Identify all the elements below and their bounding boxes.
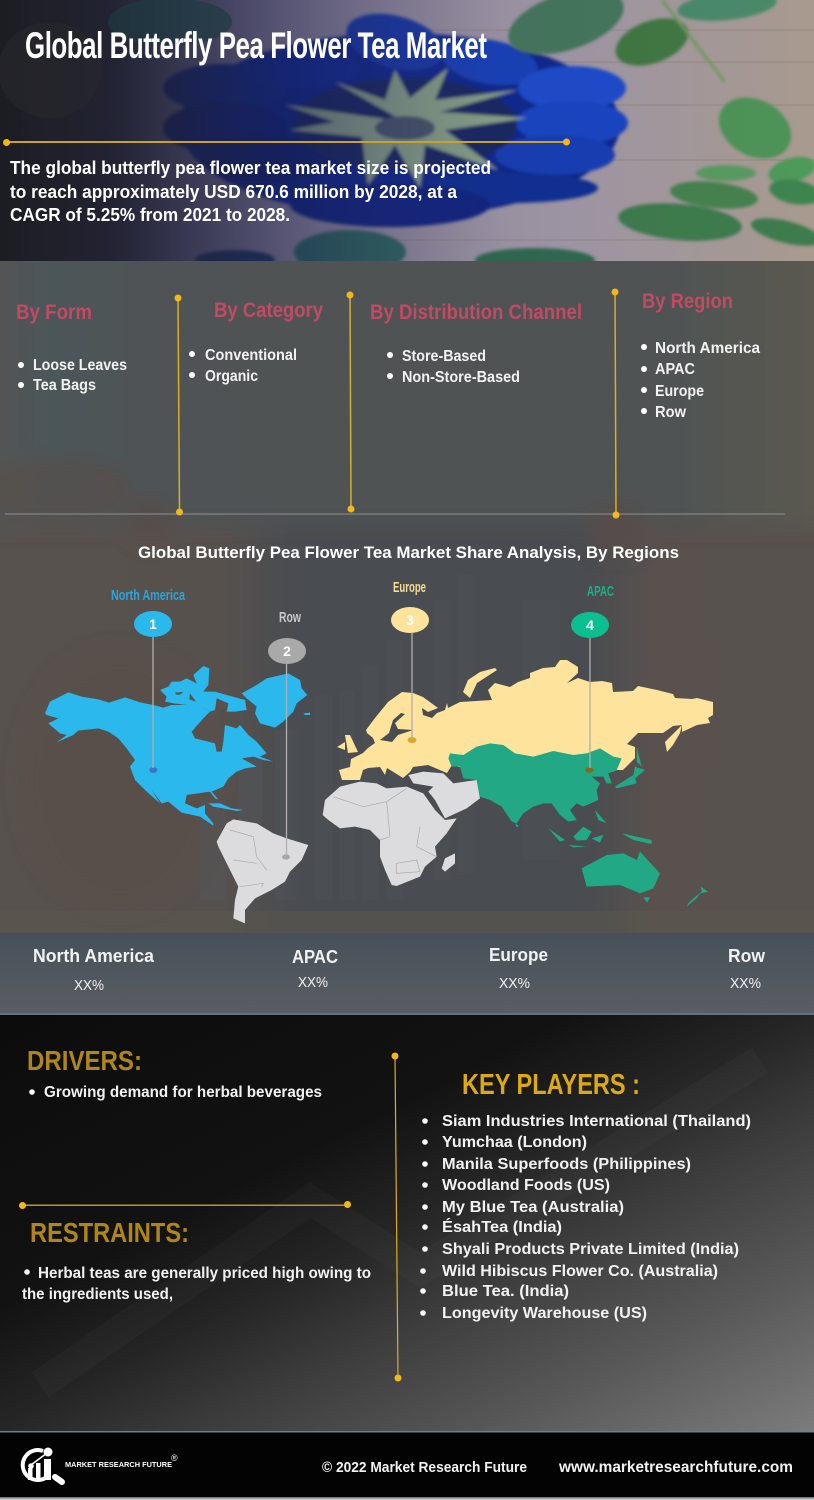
list: By Region items: North America (655, 340, 760, 357)
list: By Category items: Conventional (205, 347, 297, 364)
intro text block: to reach approximately USD 670.6 million by 2028, at a (10, 182, 458, 202)
vertical divider (392, 1052, 402, 1382)
map pin lines (153, 633, 590, 855)
restraints divider (19, 1201, 351, 1209)
stat: North America (33, 946, 155, 994)
heading: By Category: By Category (214, 299, 323, 322)
map: Africa and Middle East (323, 772, 480, 886)
list: key players: Blue Tea. (India) (442, 1283, 569, 1300)
intro text block: CAGR of 5.25% from 2021 to 2028. (10, 205, 290, 225)
text: restraint item: the ingredients used, (22, 1286, 173, 1303)
photo: butterfly pea flower (163, 4, 628, 227)
map: South America (217, 819, 308, 923)
list: key players: My Blue Tea (Australia) (442, 1199, 624, 1216)
heading: market share analysis: Global Butterfly Pea Flower Tea Market Share Analysis, By Regions (138, 543, 679, 562)
stat: Row: XX% (730, 975, 761, 992)
pin 1: North America: North America (111, 587, 185, 604)
pin 1: North America: 1 (149, 616, 157, 632)
pin 4: APAC: 4 (586, 617, 594, 633)
text: driver item: Growing demand for herbal beverages (44, 1084, 322, 1101)
list: By Category items: Organic (205, 368, 258, 385)
world map (45, 633, 713, 923)
pin 4: APAC: APAC (587, 583, 614, 600)
list: By Distribution Channel items: Store-Based (402, 348, 486, 365)
list: By Region items: Row (655, 404, 687, 421)
heading: By Distribution Channel: By Distribution Channel (370, 301, 582, 324)
pin 3: Europe: Europe (393, 579, 426, 596)
list: key players: Wild Hibiscus Flower Co. (Australia) (442, 1263, 718, 1280)
header divider with dots (3, 138, 570, 146)
panel: header photo banner (0, 0, 814, 274)
logo wordmark: MARKET RESEARCH FUTURE (65, 1460, 172, 1469)
pin 4: APAC (571, 583, 614, 638)
stat: Row: Row (728, 946, 766, 966)
list: By Category items (189, 347, 297, 385)
heading: By Region: By Region (642, 290, 733, 313)
heading: restraints: RESTRAINTS: (30, 1217, 189, 1248)
stat: North America: XX% (74, 977, 104, 994)
stat: APAC: APAC (292, 947, 338, 967)
stat: Row (728, 946, 766, 992)
registered mark: ® (171, 1453, 178, 1463)
section dividers with dots (5, 288, 785, 518)
stat: Europe (489, 945, 548, 992)
text: restraint item: Herbal teas are generally priced high owing to (38, 1265, 371, 1282)
list: By Form items: Loose Leaves (33, 357, 127, 374)
website: www.marketresearchfuture.com (558, 1459, 793, 1476)
panel: middle background (0, 261, 814, 933)
pin 3: Europe: 3 (406, 612, 414, 628)
list: By Form items: Tea Bags (33, 377, 96, 394)
list: By Distribution Channel items (387, 348, 520, 386)
intro text block: The global butterfly pea flower tea market size is projected (10, 158, 491, 178)
copyright: © 2022 Market Research Future (322, 1459, 527, 1476)
list: By Region items (641, 340, 760, 421)
heading: drivers: DRIVERS: (27, 1045, 142, 1076)
list: key players: Longevity Warehouse (US) (442, 1305, 647, 1322)
list: By Region items: APAC (655, 361, 695, 378)
title: Global Butterfly Pea Flower Tea Market (25, 24, 487, 66)
panel: footer (0, 1431, 814, 1500)
pin 1: North America (111, 587, 185, 637)
text: restraint item (22, 1265, 371, 1303)
pin 2: Row: 2 (283, 643, 291, 659)
map: Asia Pacific (448, 743, 708, 907)
list: key players: ÉsahTea (India) (442, 1219, 562, 1236)
list: key players: Shyali Products Private Limited (India) (442, 1241, 739, 1258)
icon: Market Research Future logo (23, 1448, 62, 1482)
heading: key players: KEY PLAYERS : (462, 1069, 640, 1101)
panel: drivers, restraints and key players background (0, 1013, 814, 1431)
heading: By Form: By Form (16, 301, 92, 324)
list: key players (420, 1113, 751, 1322)
list: By Region items: Europe (655, 383, 704, 400)
list: By Form items (18, 357, 127, 394)
map: Europe and Russia (337, 660, 713, 780)
pin 2: Row (268, 609, 306, 664)
list: key players: Manila Superfoods (Philippines) (442, 1156, 691, 1173)
panel: regional share strip (0, 933, 814, 1013)
pin 2: Row: Row (279, 609, 301, 626)
intro text block (10, 158, 491, 225)
stat: Europe: Europe (489, 945, 548, 965)
list: key players: Yumchaa (London) (442, 1134, 587, 1151)
stat: North America: North America (33, 946, 155, 966)
list: key players: Woodland Foods (US) (442, 1177, 610, 1194)
stat: Europe: XX% (499, 975, 530, 992)
pin 3: Europe (391, 579, 429, 633)
stat: APAC (292, 947, 338, 991)
map: North America (45, 666, 310, 826)
photo: green leaves (195, 0, 814, 274)
list: key players: Siam Industries International (Thailand) (442, 1113, 751, 1130)
list: By Distribution Channel items: Non-Store-Based (402, 369, 520, 386)
stat: APAC: XX% (298, 974, 328, 991)
